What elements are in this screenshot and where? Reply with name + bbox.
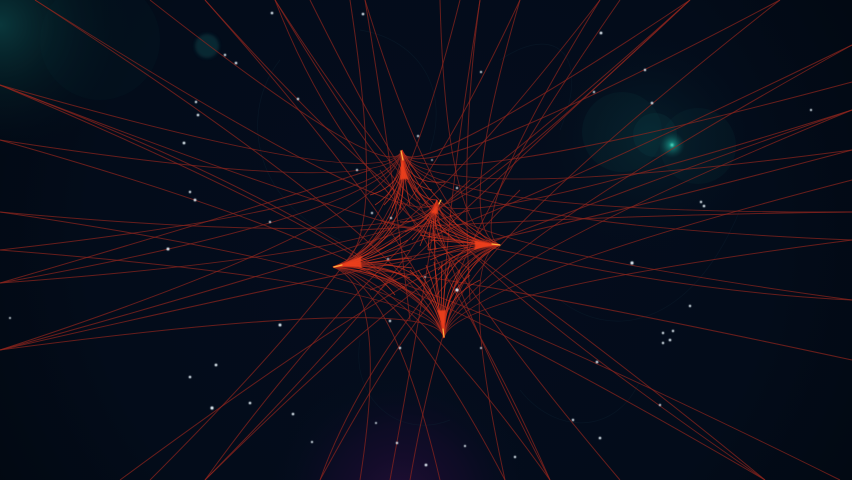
fan: bottom tip <box>410 262 480 338</box>
fan: top tip <box>370 150 445 210</box>
tip: top <box>400 149 409 180</box>
curves from left tip <box>333 0 852 480</box>
star tip fans <box>333 150 500 338</box>
star outline arcs between tips <box>333 150 500 338</box>
fan: left tip <box>333 225 412 295</box>
star tips glow <box>332 149 501 339</box>
curves from right tip <box>0 0 600 480</box>
faint background arcs <box>258 30 740 425</box>
tip: inner <box>430 200 440 215</box>
lens flare glows <box>40 0 736 184</box>
star tip highlights <box>334 151 500 337</box>
tip: right <box>474 240 501 250</box>
tip: bottom <box>437 310 446 339</box>
tip: left <box>332 256 362 268</box>
curves from bottom tip <box>0 0 852 350</box>
fan: inner tip <box>400 200 455 250</box>
fan: right tip <box>420 215 500 280</box>
